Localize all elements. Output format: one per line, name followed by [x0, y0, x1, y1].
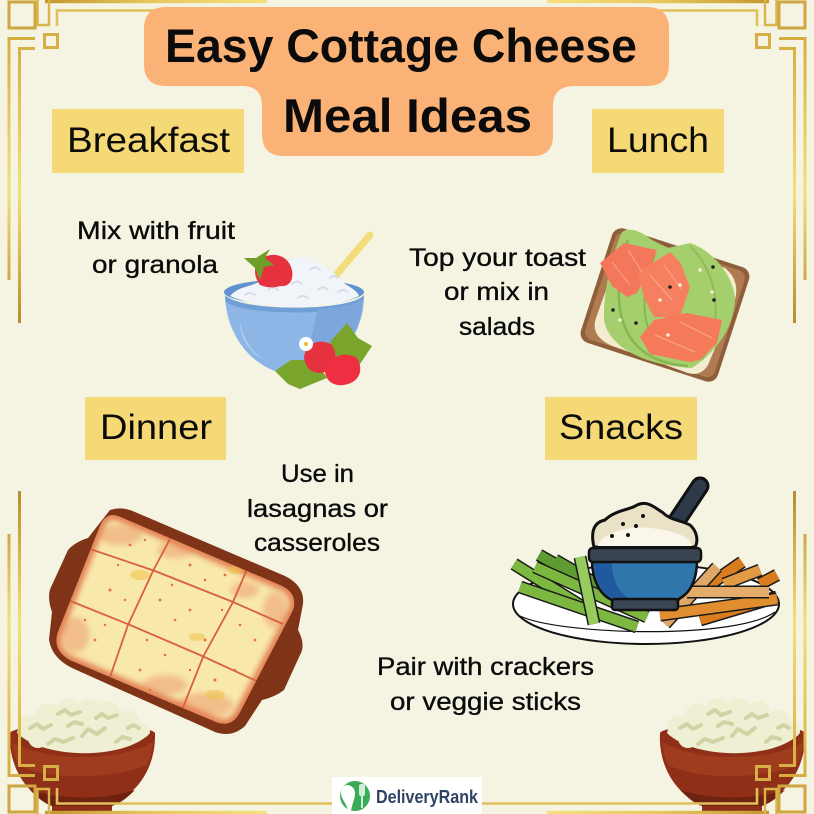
icon: dip bowl with celery and carrot sticks: [513, 486, 779, 644]
panel: snacks: [377, 397, 779, 716]
heading: snacks: Snacks: [559, 408, 683, 447]
heading: breakfast: [52, 109, 244, 173]
title: Meal Ideas: [283, 89, 532, 142]
text: lunch tip: salads: [459, 313, 535, 341]
text: dinner tip: casseroles: [254, 529, 380, 557]
logo: DeliveryRank: [332, 777, 482, 814]
icon: bowl of cottage cheese, bottom right: [660, 698, 805, 814]
text: lunch tip: or mix in: [444, 278, 549, 306]
panel: dinner: [49, 397, 388, 734]
text: snacks tip: Pair with crackers: [377, 653, 594, 681]
heading: dinner: Dinner: [100, 408, 212, 447]
text: breakfast tip: [77, 217, 235, 279]
title: Easy Cottage Cheese: [165, 19, 637, 72]
icon: lasagna in baking dish: [49, 508, 303, 734]
text: lunch tip: Top your toast: [409, 244, 586, 272]
heading: breakfast: Breakfast: [67, 121, 230, 160]
heading: dinner: [85, 397, 226, 460]
title: [144, 7, 669, 156]
text: dinner tip: lasagnas or: [247, 495, 388, 523]
text: lunch tip: [409, 244, 586, 341]
text: dinner tip: Use in: [281, 460, 354, 488]
text: snacks tip: or veggie sticks: [390, 688, 581, 716]
text: dinner tip: [247, 460, 388, 557]
text: snacks tip: [377, 653, 594, 716]
text: breakfast tip: or granola: [92, 251, 218, 279]
icon: bowl of cottage cheese, bottom left: [10, 698, 155, 814]
icon: blue bowl with cottage cheese and strawberries: [224, 235, 372, 389]
heading: lunch: Lunch: [607, 121, 709, 160]
icon: avocado and salmon toast: [578, 226, 752, 384]
text: breakfast tip: Mix with fruit: [77, 217, 235, 245]
panel: lunch: [409, 109, 752, 384]
heading: snacks: [545, 397, 697, 460]
heading: lunch: [592, 109, 724, 173]
logo: DeliveryRank: DeliveryRank: [376, 787, 479, 807]
panel: breakfast: [52, 109, 372, 389]
